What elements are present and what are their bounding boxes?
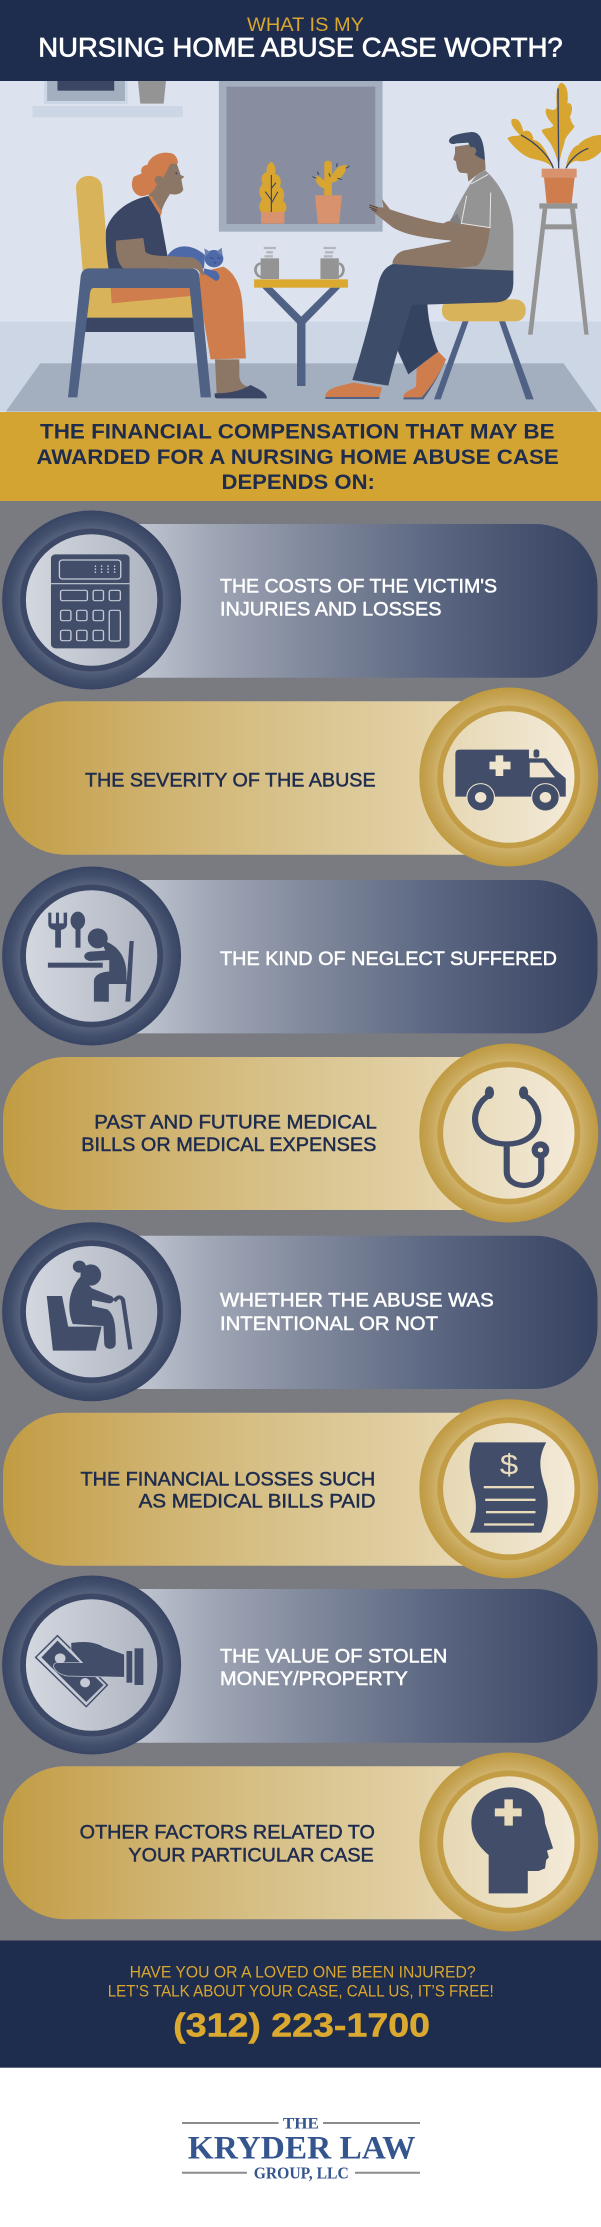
factor 4: medical bills: PAST AND FUTURE MEDICAL (94, 1112, 377, 1134)
subtitle band: THE FINANCIAL COMPENSATION THAT MAY BE (40, 418, 555, 443)
icon: ambulance (455, 749, 566, 811)
factor 3: neglect (2, 866, 598, 1046)
factor 6: financial losses (3, 1399, 598, 1578)
grey factors background (0, 501, 601, 1941)
near shoe (325, 383, 382, 399)
man seated and right plant (325, 83, 601, 399)
vase (138, 81, 166, 104)
head (453, 143, 486, 182)
icon: person unable to eat (48, 912, 134, 1002)
subtitle band (0, 412, 601, 501)
window plant left (259, 162, 287, 224)
factor 2: severity (3, 688, 598, 866)
title: NURSING HOME ABUSE CASE WORTH? (38, 33, 563, 63)
phone number: (312) 223-1700 (173, 2007, 430, 2044)
shelf (33, 106, 183, 117)
logo: The Kryder Law Group: THE (283, 2115, 319, 2132)
factor 6: financial losses: THE FINANCIAL LOSSES SUCH (80, 1469, 375, 1491)
logo: The Kryder Law Group (182, 2115, 420, 2183)
title kicker: WHAT IS MY (247, 14, 364, 36)
logo: The Kryder Law Group: GROUP, LLC (254, 2164, 349, 2183)
window plant right (312, 161, 350, 224)
icon: calculator (51, 554, 130, 648)
footer call to action (0, 1940, 601, 2068)
picture frame (44, 81, 128, 104)
icon: hand with money (36, 1636, 143, 1707)
cups (255, 248, 343, 279)
hand markings (369, 205, 377, 212)
factor 8: other factors: OTHER FACTORS RELATED TO (80, 1822, 375, 1844)
factor 1: costs: INJURIES AND LOSSES (220, 599, 442, 621)
hair (449, 132, 485, 160)
woman in armchair with cat (68, 153, 267, 398)
factor 6: financial losses: AS MEDICAL BILLS PAID (139, 1491, 376, 1513)
subtitle band: AWARDED FOR A NURSING HOME ABUSE CASE (36, 444, 559, 469)
footer call to action: HAVE YOU OR A LOVED ONE BEEN INJURED? (130, 1963, 476, 1982)
forearm and hand (369, 199, 460, 241)
factor 5: intentional: INTENTIONAL OR NOT (220, 1313, 438, 1335)
factor 2: severity: THE SEVERITY OF THE ABUSE (85, 770, 376, 792)
factor 7: stolen money: THE VALUE OF STOLEN (220, 1646, 447, 1668)
icon: head with medical cross (471, 1787, 553, 1893)
factor 8: other factors: YOUR PARTICULAR CASE (128, 1845, 374, 1867)
factor 1: costs: THE COSTS OF THE VICTIM'S (220, 576, 497, 598)
plant stand (528, 203, 589, 335)
factor 4: medical bills: BILLS OR MEDICAL EXPENSES (81, 1134, 376, 1156)
table (254, 279, 348, 386)
factor 1: costs (2, 510, 598, 690)
window (219, 81, 383, 232)
factor 7: stolen money: MONEY/PROPERTY (220, 1668, 408, 1690)
factor 4: medical bills (3, 1044, 598, 1222)
footer call to action: LET’S TALK ABOUT YOUR CASE, CALL US, IT’S FREE! (108, 1982, 494, 2001)
shirt shadow (450, 213, 462, 240)
icon: bill: $ (500, 1448, 518, 1481)
factor 5: intentional (2, 1222, 598, 1401)
trousers (352, 263, 513, 386)
factor 8: other factors (3, 1752, 598, 1932)
icon: bill (469, 1442, 548, 1533)
factor 7: stolen money (2, 1576, 598, 1754)
right plant (507, 83, 601, 203)
icon: elderly person seated with cane (47, 1261, 130, 1351)
upper arm (392, 223, 490, 268)
subtitle band: DEPENDS ON: (222, 469, 375, 494)
shirt seams (461, 174, 491, 228)
logo: The Kryder Law Group: KRYDER LAW (188, 2131, 416, 2167)
illustration: nursing home visit (0, 81, 601, 412)
stool (434, 299, 534, 399)
header banner (0, 0, 601, 81)
far leg and shoe (397, 303, 446, 399)
room background (0, 81, 601, 412)
icon: stethoscope (475, 1086, 549, 1185)
factor 3: neglect: THE KIND OF NEGLECT SUFFERED (220, 948, 557, 970)
ear (468, 147, 476, 155)
shirt (451, 170, 513, 271)
factor 5: intentional: WHETHER THE ABUSE WAS (220, 1290, 494, 1312)
